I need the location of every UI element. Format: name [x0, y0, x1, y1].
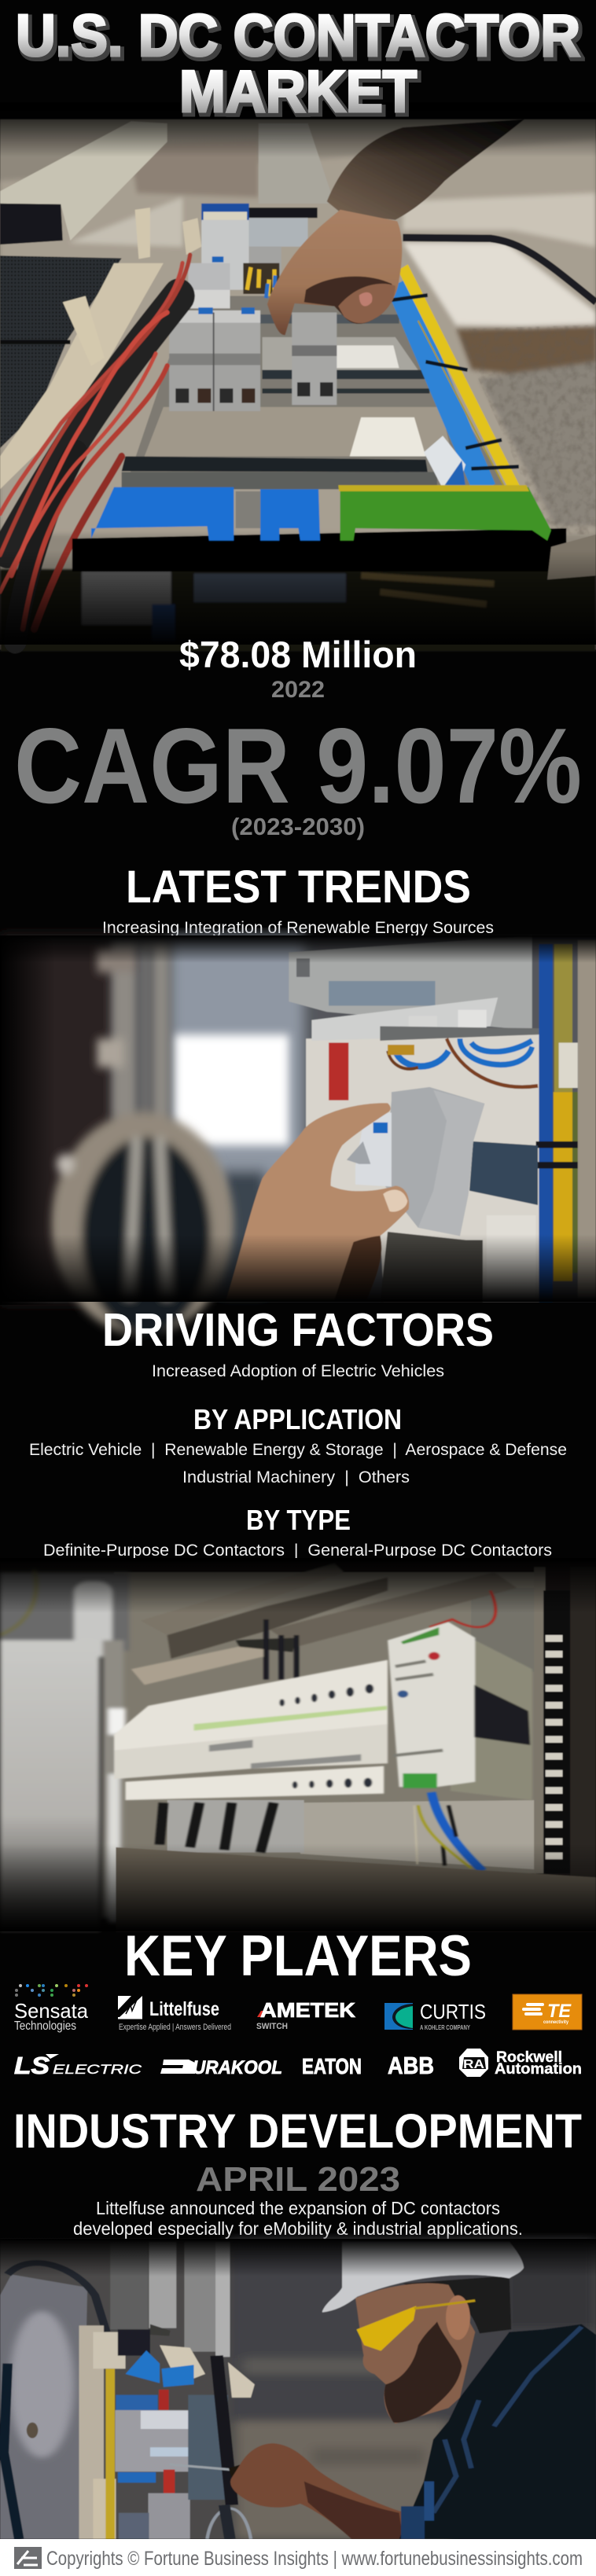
- grey contactors row: [169, 307, 260, 411]
- perforated metal panel: [0, 255, 122, 448]
- ladder duct right: [534, 1567, 596, 1881]
- logo: Ametek: [256, 1998, 355, 2031]
- shelf: [116, 1847, 596, 1931]
- top fade: [0, 1558, 596, 1613]
- photo: hand holding breaker: [0, 935, 596, 1335]
- photo: hand installing contactor on panel: [0, 119, 596, 652]
- top module group: [188, 204, 318, 308]
- logo: ABB: ABB: [388, 2052, 434, 2079]
- beige trim: [0, 208, 201, 489]
- logo: Sensata: Technologies: [14, 2019, 76, 2033]
- logo: LS Electric: LS: [14, 2052, 50, 2079]
- photo: electrician with hard hat: [0, 2239, 596, 2539]
- panel tray: [122, 296, 506, 489]
- forecast period: (2023-2030): [231, 813, 365, 840]
- logo: Curtis: [384, 2000, 486, 2031]
- top fade: [0, 2239, 596, 2277]
- din rail: [469, 1141, 538, 1205]
- title: [16, 2, 580, 124]
- logo: Ametek: AMETEK: [260, 1998, 355, 2022]
- window glow: [175, 1034, 289, 1145]
- logo: Littelfuse: Littelfuse: [149, 1998, 219, 2020]
- application list line 2: Industrial Machinery | Others: [182, 1468, 410, 1486]
- hoodie: [399, 2324, 596, 2539]
- left fade: [0, 935, 55, 1305]
- date: APRIL 2023: [196, 2160, 400, 2199]
- cable duct: [0, 121, 334, 244]
- heading: latest trends: LATEST TRENDS: [126, 862, 471, 913]
- bottom fade: [0, 1843, 596, 1931]
- heading: driving factors: DRIVING FACTORS: [102, 1304, 494, 1356]
- red and black cable bundle: [0, 255, 190, 641]
- concrete floor: [0, 140, 596, 535]
- top fade: [0, 102, 596, 157]
- logo: Rockwell Automation: [459, 2049, 582, 2078]
- wall: [114, 1572, 536, 1873]
- logo: Curtis: CURTIS: [420, 2000, 486, 2023]
- blurred foreground left: [0, 1570, 129, 1931]
- breaker in hand: [347, 1087, 484, 1236]
- head: [355, 2276, 511, 2423]
- logo: TE Connectivity: connectivity: [543, 2020, 569, 2025]
- application list line 1: Electric Vehicle | Renewable Energy & Storage | Aerospace & Defense: [29, 1441, 567, 1459]
- logo: Durakool: URAKOOL: [193, 2057, 282, 2078]
- back panel: [306, 1034, 539, 1302]
- footer bar: [0, 2539, 596, 2576]
- footer logo: [14, 2547, 42, 2569]
- blurred cable bundle: [51, 940, 234, 1335]
- development text: [73, 2198, 523, 2239]
- latest trends text: Increasing Integration of Renewable Energy Sources: [102, 919, 494, 937]
- development text: Littelfuse announced the expansion of DC contactors: [96, 2198, 500, 2218]
- logo: Littelfuse: Expertise Applied | Answers Delivered: [119, 2023, 231, 2032]
- logo: Ametek: SWITCH: [256, 2022, 288, 2031]
- hand: [226, 1103, 409, 1299]
- logo: Curtis: A KOHLER COMPANY: [420, 2024, 471, 2031]
- concrete wall: [0, 2263, 106, 2539]
- hard hat: [322, 2242, 524, 2313]
- logo: Sensata: Sensata: [14, 1999, 89, 2023]
- top fade: [0, 935, 596, 963]
- type list: Definite-Purpose DC Contactors | General-Purpose DC Contactors: [43, 1542, 552, 1560]
- upper breakers: [289, 935, 539, 1041]
- screwdriver: [169, 2464, 243, 2477]
- logo: LS Electric: ELECTRIC: [53, 2062, 142, 2077]
- heading: by application: BY APPLICATION: [193, 1403, 402, 1435]
- driving factors text: Increased Adoption of Electric Vehicles: [152, 1362, 444, 1380]
- bottom fade: [0, 550, 596, 645]
- logo: Rockwell Automation: Automation: [495, 2061, 582, 2078]
- bus bars: [72, 485, 596, 579]
- heading: by type: BY TYPE: [246, 1504, 351, 1536]
- green terminals: [296, 1793, 460, 1815]
- bottom fade: [0, 1234, 596, 1302]
- heading: key players: KEY PLAYERS: [124, 1924, 472, 1988]
- logo: TE Connectivity: [513, 1994, 582, 2030]
- blurred wall: [228, 2239, 596, 2539]
- logo: TE Connectivity: TE: [547, 2001, 572, 2022]
- wire loom right: [536, 940, 596, 1302]
- forearm and hand: [230, 2443, 403, 2539]
- photo: breaker row in enclosure: [0, 1562, 596, 1931]
- concrete texture: [456, 325, 596, 535]
- title: MARKET: [179, 58, 417, 124]
- control module: [388, 1622, 532, 1800]
- floor cable right: [403, 237, 596, 302]
- logo: LS Electric: [14, 2052, 142, 2079]
- loose wires: [414, 1792, 483, 1871]
- breaker rows: [114, 1660, 388, 1800]
- beige trim: [79, 2325, 255, 2539]
- logo: Littelfuse: [118, 1996, 231, 2032]
- forearm: [327, 119, 524, 220]
- blue and yellow wire loom: [392, 267, 519, 489]
- upper ducts: [131, 1563, 517, 1685]
- pillars: [110, 2242, 230, 2357]
- red wires: [329, 1042, 348, 1101]
- contactor being placed: [292, 312, 337, 405]
- logo: Rockwell Automation: RA: [463, 2058, 485, 2071]
- logo: Sensata: [14, 1984, 89, 2033]
- black wires below breakers: [160, 1802, 274, 1853]
- lower dim equipment: [0, 569, 596, 652]
- base year: 2022: [271, 677, 325, 703]
- wire and terminal detail: [105, 2329, 251, 2539]
- hand: [267, 210, 402, 335]
- development text: developed especially for eMobility & industrial applications.: [73, 2218, 523, 2239]
- blue and brown wires: [388, 1038, 538, 1087]
- market value: $78.08 Million: [179, 634, 417, 675]
- logo: Rockwell Automation: Rockwell: [496, 2049, 562, 2066]
- logo: Eaton: EATON: [302, 2054, 362, 2078]
